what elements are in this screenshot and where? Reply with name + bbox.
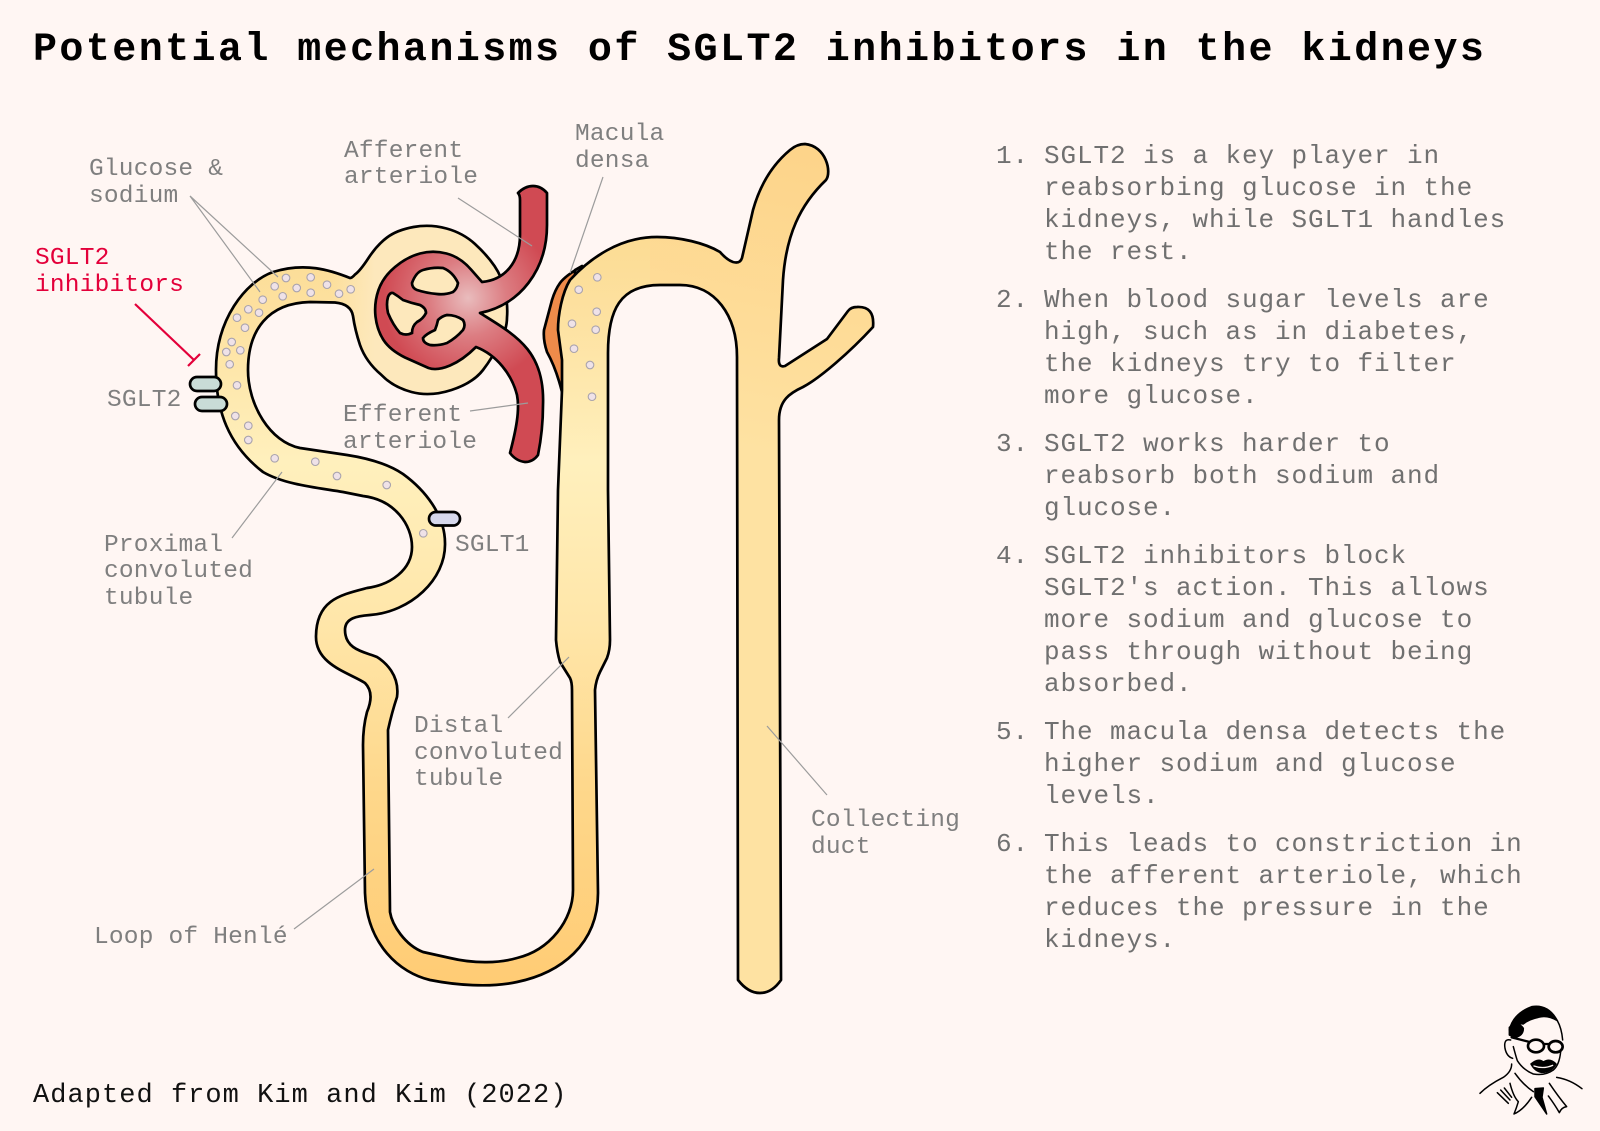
label: SGLT1: SGLT1 (455, 532, 530, 559)
title: Potential mechanisms of SGLT2 inhibitors in the kidneys (33, 28, 1486, 73)
step 2: When blood sugar levels are (1044, 285, 1490, 315)
step 1: kidneys, while SGLT1 handles (1044, 205, 1506, 235)
label: efferent arteriole: arteriole (343, 429, 477, 456)
step 3: glucose. (1044, 493, 1176, 523)
step 2: 2. (996, 285, 1029, 315)
step 1: SGLT2 is a key player in (1044, 141, 1440, 171)
numbered list (996, 141, 1523, 955)
label: proximal convoluted tubule: tubule (104, 585, 193, 612)
step 4: absorbed. (1044, 669, 1193, 699)
step 4: more sodium and glucose to (1044, 605, 1473, 635)
step 4: SGLT2 inhibitors block (1044, 541, 1407, 571)
step 4: pass through without being (1044, 637, 1473, 667)
step 1: reabsorbing glucose in the (1044, 173, 1473, 203)
label: glucose and sodium: sodium (89, 183, 178, 210)
macula densa (544, 266, 582, 392)
label: efferent arteriole: Efferent (343, 402, 462, 429)
SGLT2 transporters (190, 377, 227, 411)
step 2: high, such as in diabetes, (1044, 317, 1473, 347)
step 6: This leads to constriction in (1044, 829, 1523, 859)
label: macula densa: Macula (575, 121, 664, 148)
nephron tubule (200, 130, 890, 1000)
step 3: SGLT2 works harder to (1044, 429, 1391, 459)
label: distal convoluted tubule: convoluted (414, 740, 563, 767)
step 5: The macula densa detects the (1044, 717, 1506, 747)
step 5: levels. (1044, 781, 1160, 811)
source credit: Adapted from Kim and Kim (2022) (33, 1081, 568, 1111)
label: collecting duct: duct (811, 834, 871, 861)
step 6: the afferent arteriole, which (1044, 861, 1523, 891)
label: proximal convoluted tubule: Proximal (104, 532, 223, 559)
step 2: the kidneys try to filter (1044, 349, 1457, 379)
label: SGLT2 inhibitors: inhibitors (35, 272, 184, 299)
label: afferent arteriole: Afferent (344, 138, 463, 165)
step 1: the rest. (1044, 237, 1193, 267)
step 3: 3. (996, 429, 1029, 459)
label: SGLT2: SGLT2 (107, 387, 182, 414)
label: glucose and sodium: Glucose & (89, 156, 223, 183)
step 4: SGLT2's action. This allows (1044, 573, 1490, 603)
step 3: reabsorb both sodium and (1044, 461, 1440, 491)
step 5: higher sodium and glucose (1044, 749, 1457, 779)
nephron diagram (190, 130, 890, 1000)
step 1: 1. (996, 141, 1029, 171)
step 6: reduces the pressure in the (1044, 893, 1490, 923)
label: SGLT2 inhibitors: SGLT2 (35, 245, 110, 272)
label: distal convoluted tubule: tubule (414, 766, 503, 793)
label: loop of Henle: Loop of Henlé (94, 924, 288, 951)
arterioles and glomerulus (375, 186, 547, 462)
label: proximal convoluted tubule: convoluted (104, 558, 253, 585)
step 5: 5. (996, 717, 1029, 747)
step 2: more glucose. (1044, 381, 1259, 411)
SGLT1 transporter (429, 512, 460, 526)
step 4: 4. (996, 541, 1029, 571)
step 6: 6. (996, 829, 1029, 859)
label: macula densa: densa (575, 148, 650, 175)
leader lines (190, 177, 827, 929)
step 6: kidneys. (1044, 925, 1176, 955)
label: afferent arteriole: arteriole (344, 164, 478, 191)
inhibitor arrow (135, 304, 200, 366)
label: distal convoluted tubule: Distal (414, 713, 503, 740)
label: collecting duct: Collecting (811, 807, 960, 834)
glucose and sodium dots (222, 274, 601, 537)
icon: portrait sketch (1480, 1006, 1582, 1114)
